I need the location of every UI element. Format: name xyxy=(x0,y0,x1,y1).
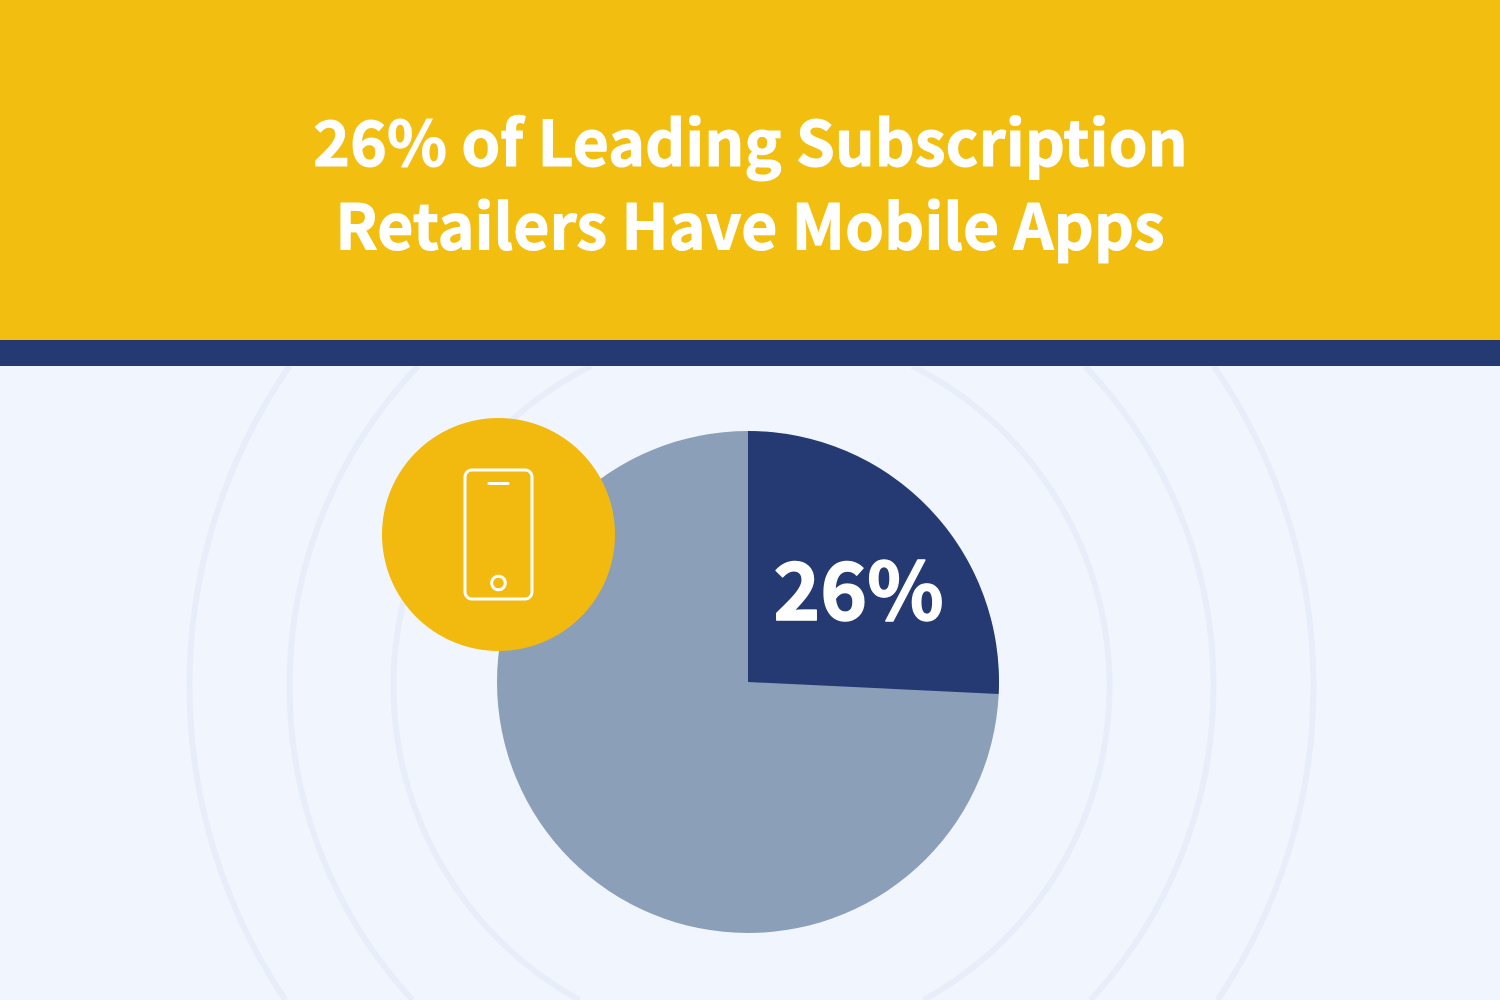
value label: 26%: 26% xyxy=(773,528,944,643)
navy divider bar xyxy=(0,340,1500,366)
title: 26% of Leading Subscription xyxy=(313,93,1188,184)
pie slice: remaining 74% xyxy=(497,431,999,933)
pie slice: 26% xyxy=(748,431,999,694)
title: Retailers Have Mobile Apps xyxy=(335,176,1165,268)
icon: mobile phone badge xyxy=(382,418,615,651)
pie chart xyxy=(497,431,999,933)
header band xyxy=(0,0,1500,340)
